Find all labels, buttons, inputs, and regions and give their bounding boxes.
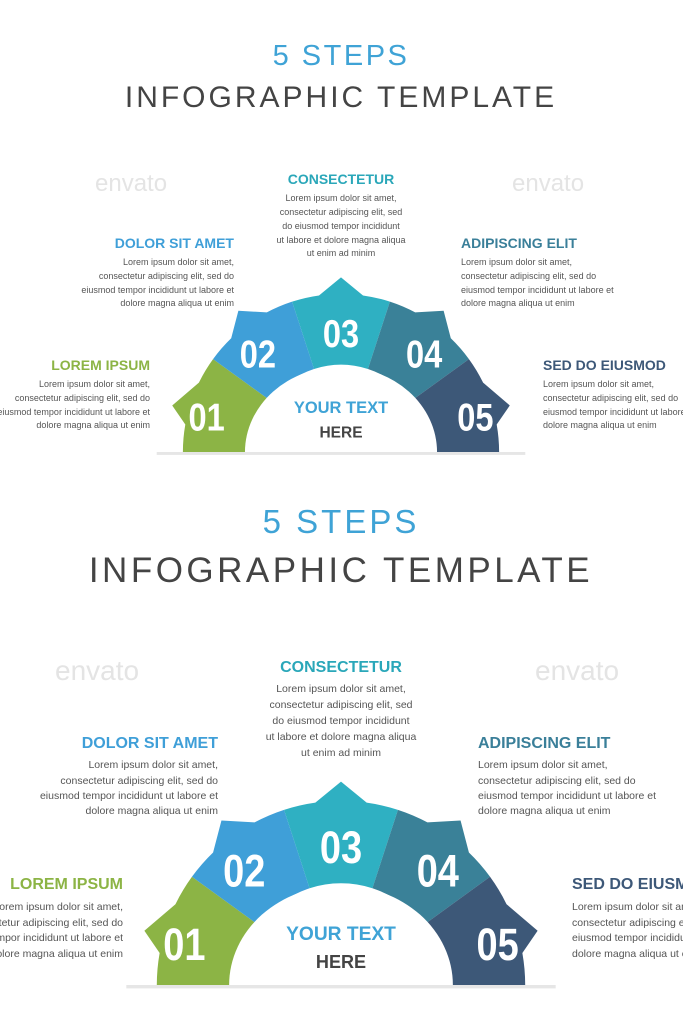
bottom title: 5 STEPS [263,503,419,540]
top labels: CONSECTETUR [288,171,394,187]
bottom title [89,503,593,590]
bottom labels: eiusmod tempor incididunt ut labore et [40,790,218,802]
top chart [157,277,525,455]
top title [125,40,557,114]
bottom labels: ADIPISCING ELIT [478,735,611,752]
top labels: eiusmod tempor incididunt ut labore et [461,285,614,295]
bottom labels: consectetur adipiscing elit, sed [270,699,413,711]
top title: INFOGRAPHIC TEMPLATE [125,81,557,114]
top labels: Lorem ipsum dolor sit amet, [39,379,150,389]
top title: 5 STEPS [273,40,409,72]
top labels: eiusmod tempor incididunt ut labore et [81,285,234,295]
bottom labels: CONSECTETUR [280,659,402,676]
bottom labels: ut enim ad minim [301,747,381,759]
bottom title: INFOGRAPHIC TEMPLATE [89,551,593,590]
watermarks bottom: envato [55,655,139,686]
bottom labels: Lorem ipsum dolor sit amet, [478,759,608,771]
bottom labels: do eiusmod tempor incididunt [272,715,410,727]
bottom labels: ut labore et dolore magna aliqua [266,731,416,743]
top labels: consectetur adipiscing elit, sed do [99,271,234,281]
top labels: DOLOR SIT AMET [115,235,234,251]
watermarks bottom [55,655,619,686]
top labels: Lorem ipsum dolor sit amet, [285,193,397,203]
top labels: dolore magna aliqua ut enim [543,420,657,430]
watermarks bottom: envato [535,655,619,686]
top labels: Lorem ipsum dolor sit amet, [543,379,654,389]
bottom chart [126,782,556,988]
top labels: dolore magna aliqua ut enim [461,298,575,308]
watermarks top: envato [95,170,167,197]
top labels: SED DO EIUSMOD [543,357,666,373]
top labels: Lorem ipsum dolor sit amet, [461,257,572,267]
top labels: consectetur adipiscing elit, sed [280,207,402,217]
watermarks top [95,170,584,197]
bottom labels: Lorem ipsum dolor sit amet, [276,683,406,695]
top labels [0,171,683,430]
top labels: dolore magna aliqua ut enim [120,298,234,308]
top labels: consectetur adipiscing elit, sed do [15,393,150,403]
top labels: dolore magna aliqua ut enim [36,420,150,430]
bottom labels [0,659,683,960]
top labels: eiusmod tempor incididunt ut labore et [0,407,150,417]
top labels: ADIPISCING ELIT [461,235,577,251]
bottom labels: DOLOR SIT AMET [82,735,218,752]
watermarks top: envato [512,170,584,197]
top labels: Lorem ipsum dolor sit amet, [123,257,234,267]
top labels: consectetur adipiscing elit, sed do [461,271,596,281]
bottom labels: dolore magna aliqua ut enim [478,805,611,817]
top labels: consectetur adipiscing elit, sed do [543,393,678,403]
top labels: LOREM IPSUM [51,357,150,373]
bottom labels: consectetur adipiscing elit, sed do [60,775,218,787]
top labels: ut labore et dolore magna aliqua [276,235,406,245]
bottom labels: Lorem ipsum dolor sit amet, [88,759,218,771]
bottom labels: eiusmod tempor incididunt ut labore et [478,790,656,802]
top labels: ut enim ad minim [307,248,375,258]
top labels: do eiusmod tempor incididunt [282,221,400,231]
bottom labels: dolore magna aliqua ut enim [85,805,218,817]
bottom labels: consectetur adipiscing elit, sed do [478,775,636,787]
bottom labels: LOREM IPSUM [10,876,123,893]
